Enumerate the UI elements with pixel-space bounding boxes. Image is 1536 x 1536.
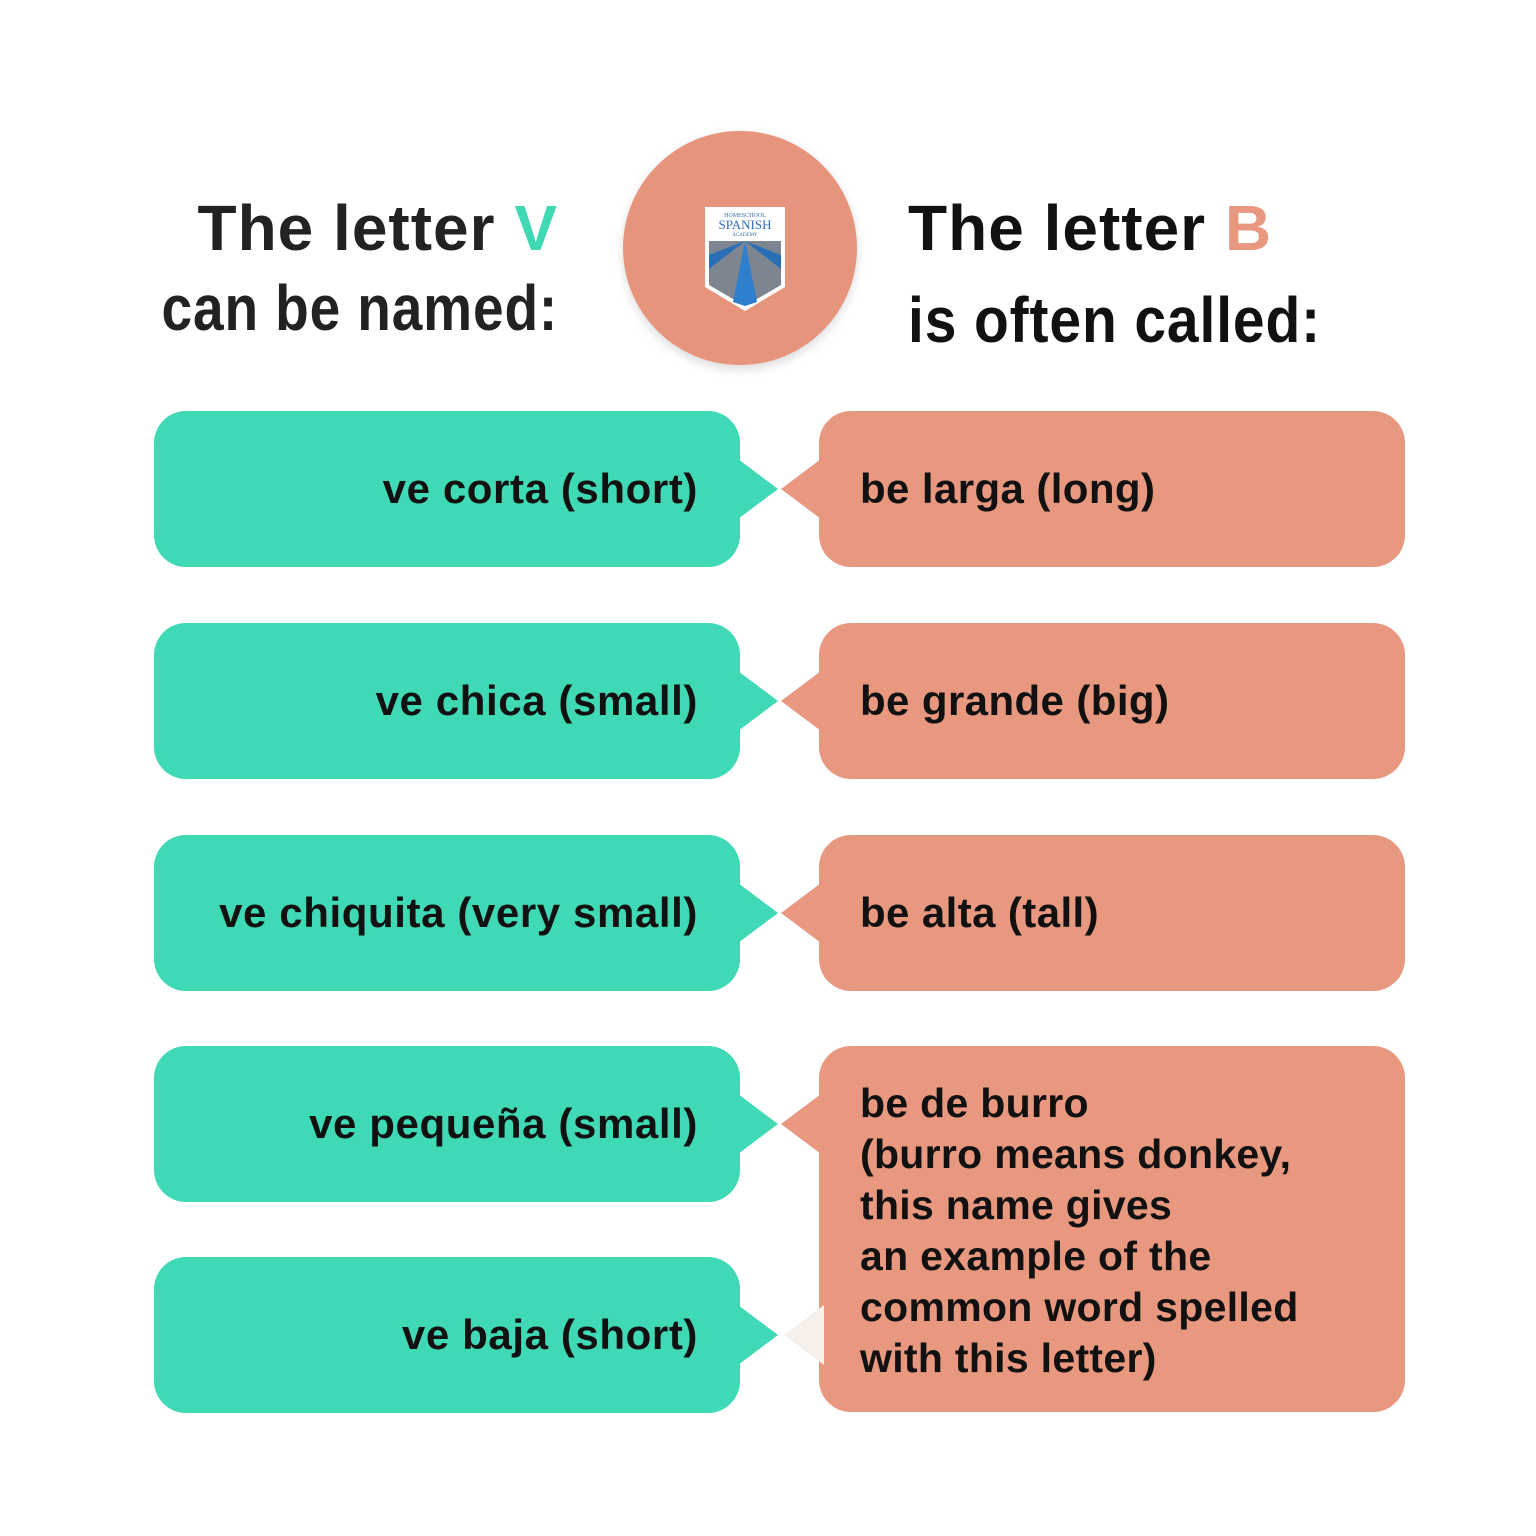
row: be larga [819,411,1405,567]
panel: B names [781,411,1405,1412]
faint arrow next to ve baja [784,1305,824,1365]
row: ve baja: ve baja (short) [402,1311,698,1358]
row: ve pequeña [154,1046,740,1202]
row: ve baja [154,1257,740,1413]
row: be alta [819,835,1405,991]
logo circle [623,131,857,365]
heading: letter V [161,192,558,344]
row: ve corta: ve corta (short) [383,465,698,512]
heading: letter B: is often called: [908,284,1321,356]
row: be de burro: (burro means donkey, [860,1131,1291,1177]
row: ve corta [154,411,740,567]
heading: letter V: The letter V [197,192,558,264]
row: be alta: be alta (tall) [860,889,1099,936]
row: be de burro: with this letter) [860,1335,1157,1381]
icon: school shield logo: SPANISH [718,217,772,232]
row: be de burro: be de burro [860,1080,1089,1126]
row: ve chiquita [154,835,740,991]
icon: school shield logo: HOMESCHOOL [724,213,766,219]
icon: school shield logo [705,207,785,311]
row: ve chica: ve chica (small) [376,677,698,724]
heading: letter V: can be named: [161,272,558,344]
row: be larga: be larga (long) [860,465,1155,512]
heading: letter B: The letter B [908,192,1272,264]
panel: V names [154,411,778,1413]
row: be grande [819,623,1405,779]
row: be de burro: common word spelled [860,1284,1299,1330]
row: be de burro: an example of the [860,1233,1211,1279]
icon: school shield logo: ACADEMY [732,233,758,238]
row: ve chiquita: ve chiquita (very small) [219,889,698,936]
row: be grande: be grande (big) [860,677,1169,724]
row: ve pequeña: ve pequeña (small) [309,1100,698,1147]
heading: letter B [908,192,1321,356]
row: ve chica [154,623,740,779]
row: be de burro [819,1046,1405,1412]
arrow pointing at be de burro [781,1094,821,1154]
row: be de burro: this name gives [860,1182,1172,1228]
